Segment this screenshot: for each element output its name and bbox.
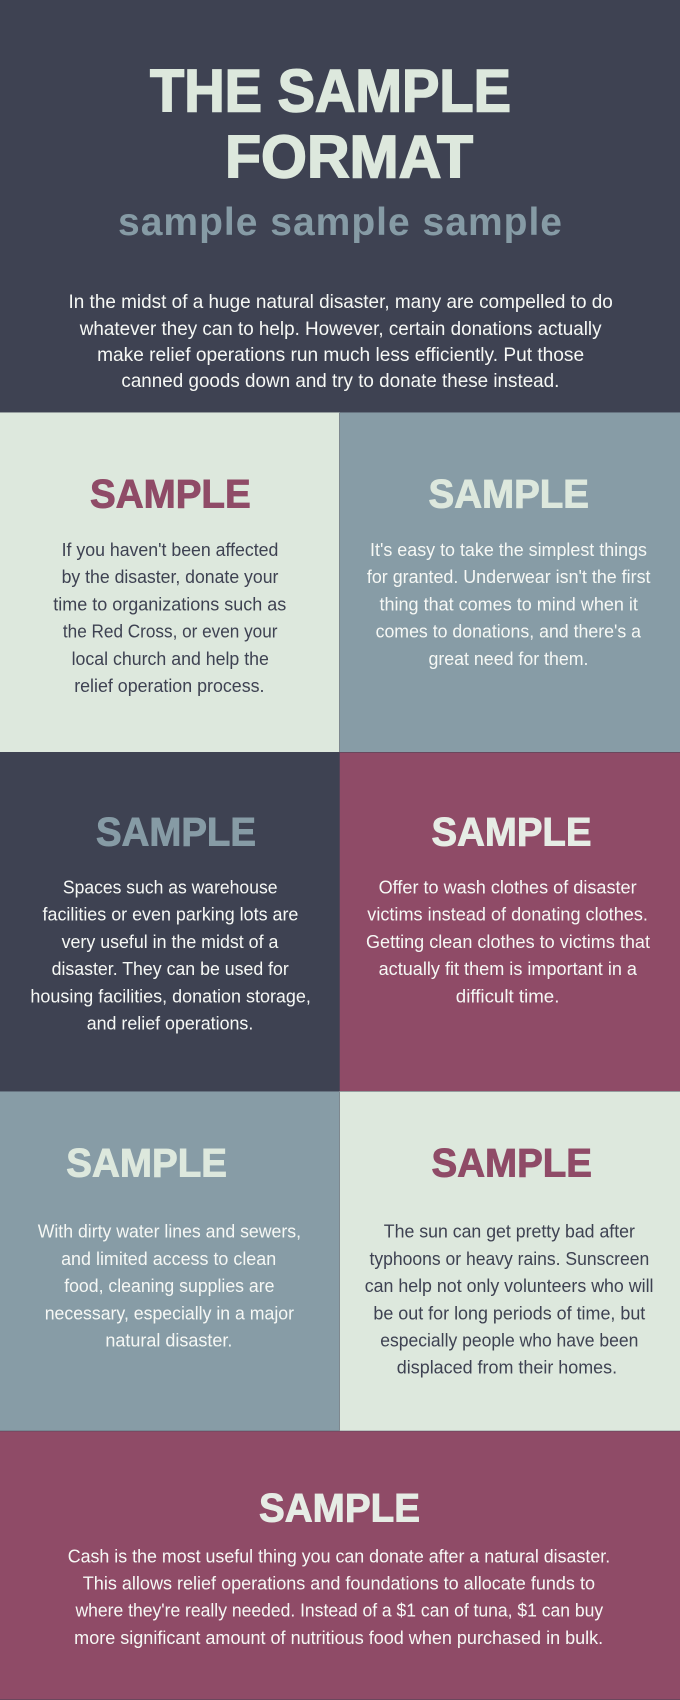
- body text: This allows relief operations and foundations to allocate funds to: [83, 1574, 595, 1594]
- body text: victims instead of donating clothes.: [367, 905, 648, 925]
- body text: for granted. Underwear isn't the first: [367, 567, 650, 587]
- intro text: whatever they can to help. However, certain donations actually: [79, 318, 602, 340]
- body text: If you haven't been affected: [62, 540, 278, 560]
- body text: [68, 1546, 610, 1648]
- body text: Cash is the most useful thing you can donate after a natural disaster.: [68, 1546, 610, 1566]
- body text: difficult time.: [456, 986, 559, 1006]
- body text: especially people who have been: [380, 1330, 638, 1350]
- body text: disaster. They can be used for: [52, 959, 289, 979]
- intro text: In the midst of a huge natural disaster, many are compelled to do: [68, 291, 613, 313]
- body text: necessary, especially in a major: [45, 1303, 294, 1323]
- body text: The sun can get pretty bad after: [384, 1222, 635, 1242]
- body text: Getting clean clothes to victims that: [366, 932, 650, 952]
- heading: sample: SAMPLE: [428, 472, 589, 516]
- body text: [30, 877, 311, 1033]
- body text: food, cleaning supplies are: [64, 1276, 274, 1296]
- body text: displaced from their homes.: [397, 1358, 617, 1378]
- title: [150, 56, 511, 190]
- heading: sample: SAMPLE: [432, 1141, 592, 1185]
- body text: great need for them.: [428, 649, 588, 669]
- panel: cash: [0, 1431, 680, 1700]
- body text: typhoons or heavy rains. Sunscreen: [370, 1249, 649, 1269]
- body text: facilities or even parking lots are: [42, 905, 298, 925]
- body text: [367, 540, 650, 669]
- heading: sample: SAMPLE: [96, 811, 256, 855]
- panel: spaces: [0, 752, 340, 1091]
- intro text: canned goods down and try to donate these instead.: [121, 370, 559, 392]
- intro text: [68, 291, 613, 392]
- panel: underwear: [340, 412, 680, 752]
- body text: the Red Cross, or even your: [63, 622, 278, 642]
- panel: sunscreen: [340, 1091, 680, 1431]
- body text: With dirty water lines and sewers,: [38, 1222, 301, 1242]
- body text: [38, 1222, 301, 1350]
- panel: wash clothes: [340, 752, 680, 1091]
- body text: local church and help the: [72, 649, 269, 669]
- body text: and relief operations.: [87, 1013, 253, 1033]
- body text: Offer to wash clothes of disaster: [379, 877, 637, 897]
- title: THE SAMPLE: [150, 56, 511, 124]
- body text: by the disaster, donate your: [62, 567, 278, 587]
- subtitle: sample sample sample: [118, 201, 562, 244]
- body text: [365, 1222, 654, 1378]
- body text: housing facilities, donation storage,: [30, 986, 311, 1006]
- heading: sample: SAMPLE: [259, 1486, 420, 1530]
- intro text: make relief operations run much less efficiently. Put those: [97, 344, 584, 366]
- panel: header: [0, 0, 680, 412]
- body text: relief operation process.: [74, 676, 264, 696]
- body text: thing that comes to mind when it: [380, 595, 638, 615]
- body text: actually fit them is important in a: [379, 959, 638, 979]
- body text: more significant amount of nutritious food when purchased in bulk.: [74, 1628, 603, 1648]
- body text: [366, 877, 650, 1006]
- body text: and limited access to clean: [61, 1249, 276, 1269]
- body text: very useful in the midst of a: [62, 932, 279, 952]
- body text: natural disaster.: [105, 1330, 232, 1350]
- body text: Spaces such as warehouse: [63, 877, 278, 897]
- body text: time to organizations such as: [53, 595, 286, 615]
- panel: donate time: [0, 412, 340, 752]
- title: FORMAT: [225, 122, 473, 190]
- body text: can help not only volunteers who will: [365, 1276, 654, 1296]
- body text: where they're really needed. Instead of a $1 can of tuna, $1 can buy: [75, 1601, 603, 1621]
- heading: sample: SAMPLE: [90, 472, 251, 516]
- panel: cleaning supplies: [0, 1091, 340, 1431]
- heading: sample: SAMPLE: [432, 811, 592, 855]
- body text: It's easy to take the simplest things: [370, 540, 647, 560]
- heading: sample: SAMPLE: [66, 1141, 227, 1185]
- body text: [53, 540, 286, 696]
- body text: comes to donations, and there's a: [376, 622, 642, 642]
- body text: be out for long periods of time, but: [373, 1303, 645, 1323]
